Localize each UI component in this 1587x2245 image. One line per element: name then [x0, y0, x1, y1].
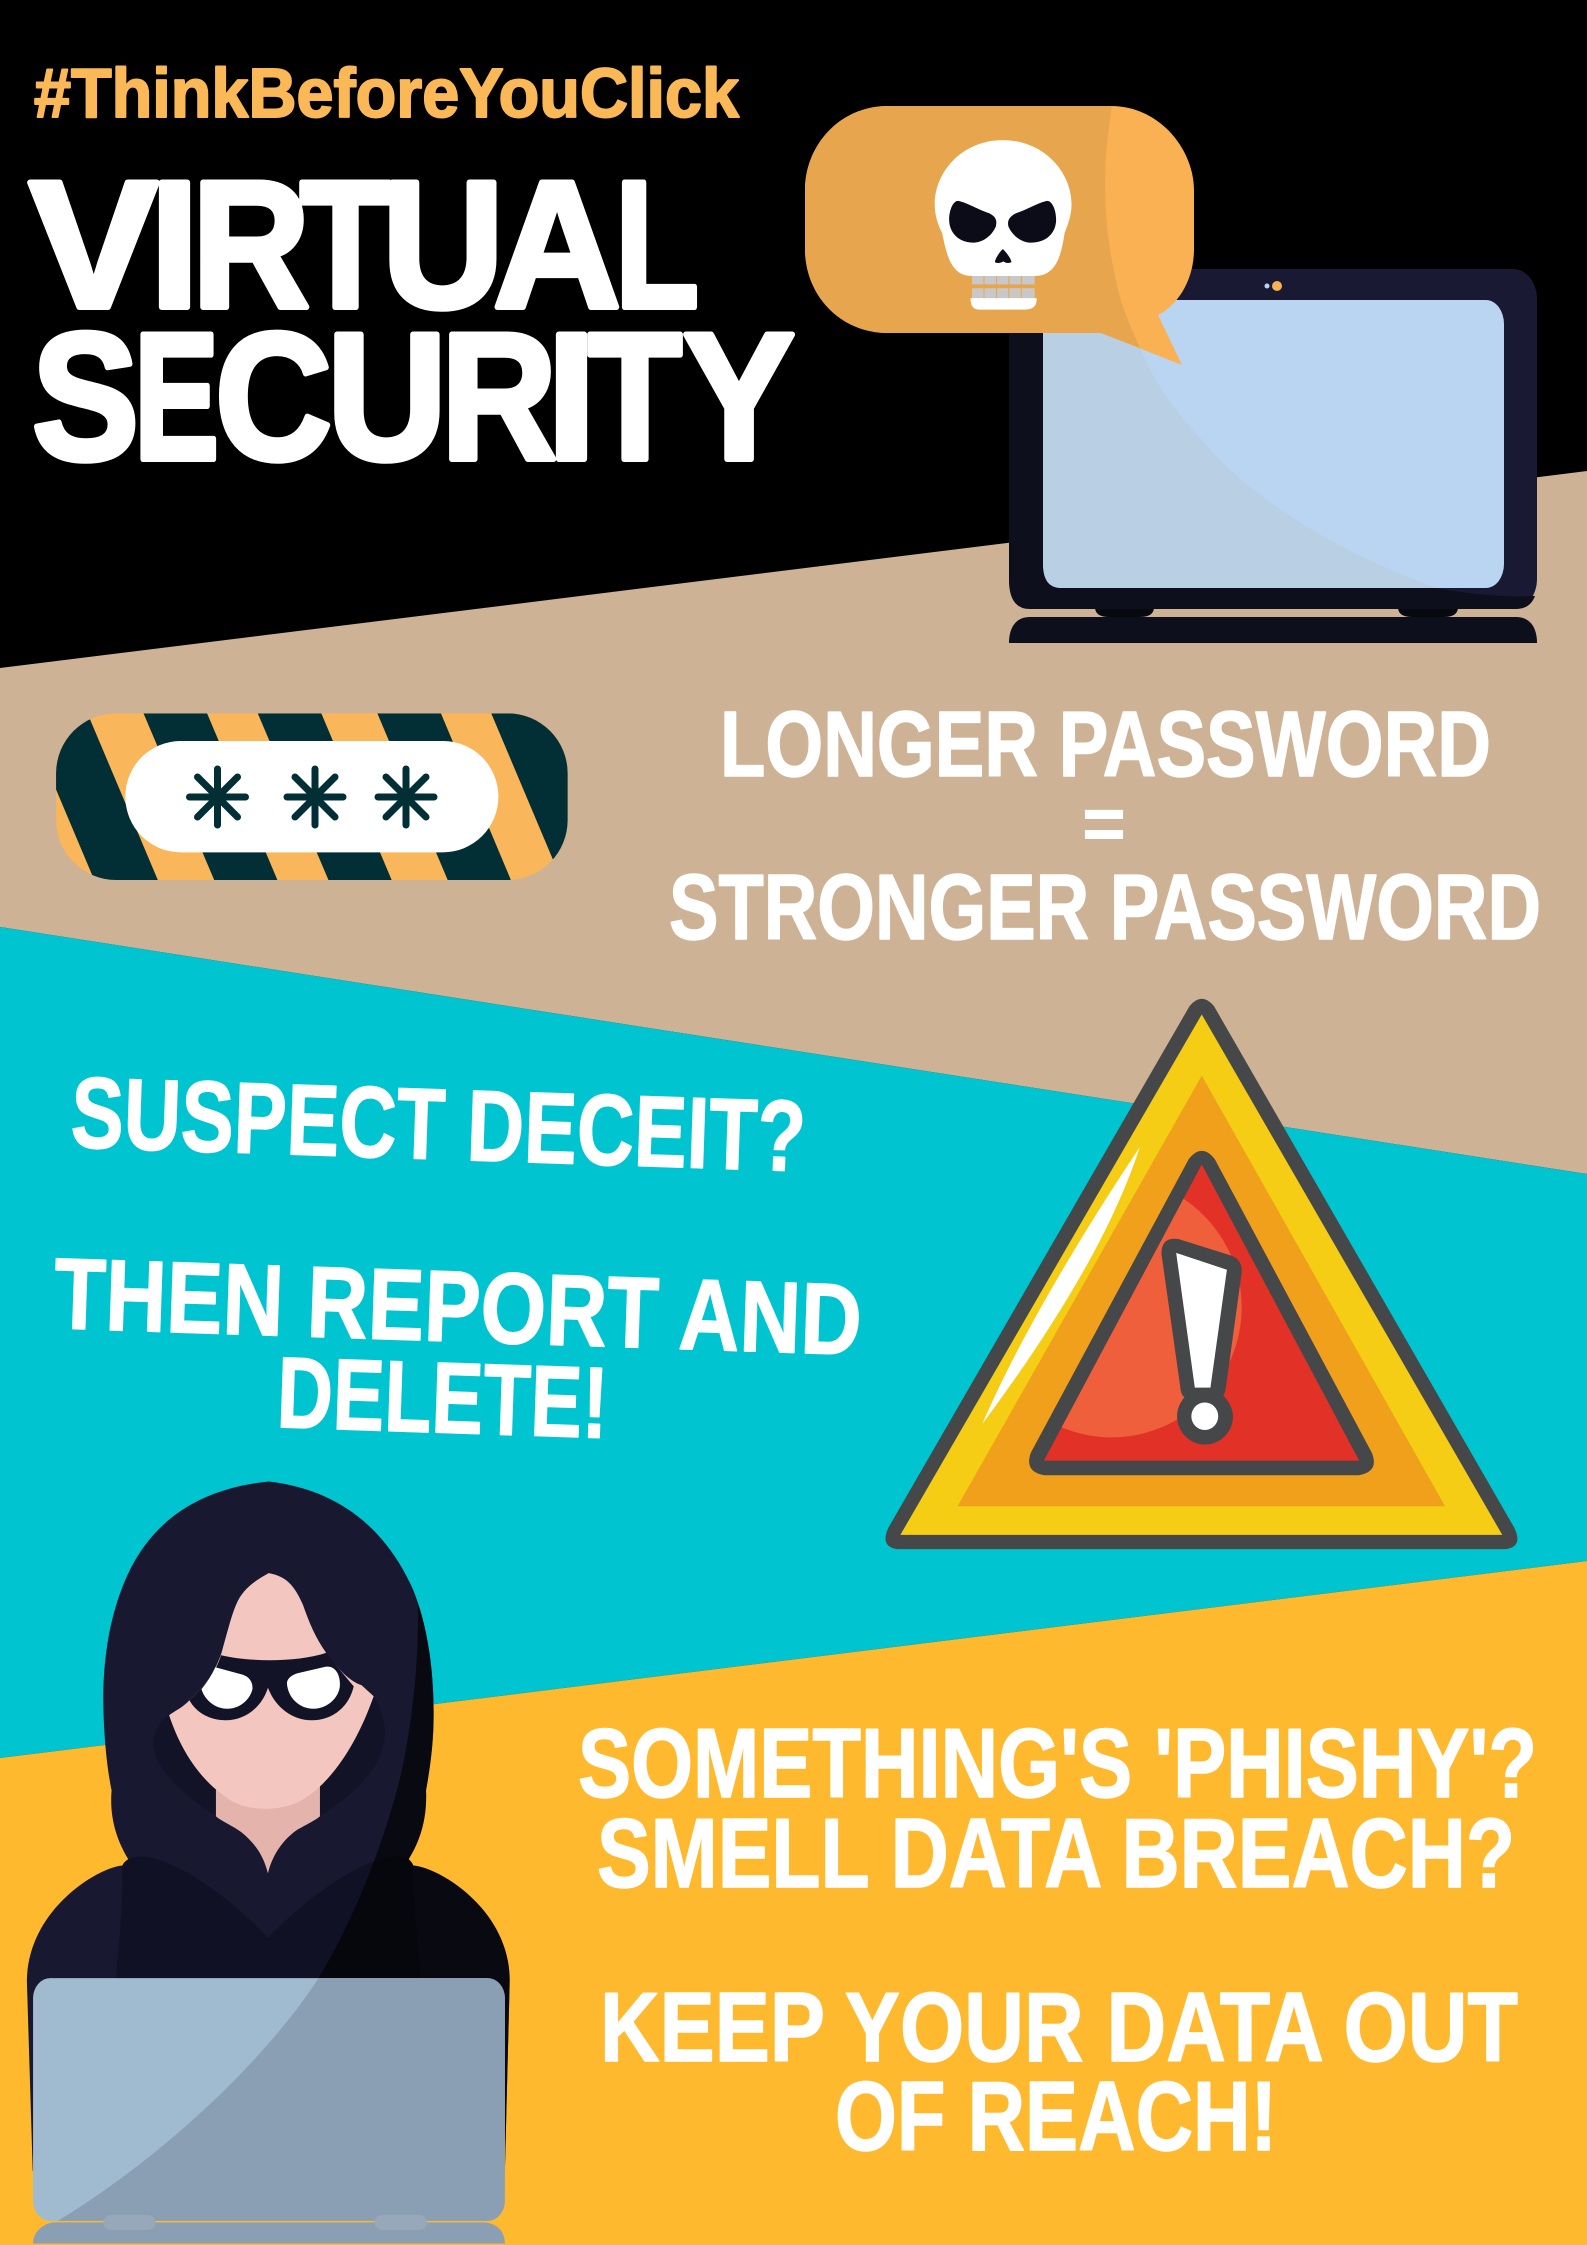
icon: password field [24, 713, 573, 880]
title [29, 144, 795, 498]
text: suspect deceit, report and delete: THEN REPORT AND [52, 1238, 864, 1377]
icon: laptop [1009, 269, 1537, 643]
title line: virtual: V [29, 144, 158, 346]
title line: virtual: T [300, 144, 391, 346]
triangle orange fill [958, 1076, 1445, 1506]
inner outline [1029, 1151, 1374, 1475]
inner highlight [1062, 1198, 1242, 1438]
title line: virtual: R [192, 144, 310, 346]
title line: virtual: A [493, 144, 621, 346]
password white field [125, 741, 498, 852]
password asterisks [190, 769, 434, 825]
title line: security: C [215, 296, 332, 498]
title line: virtual: U [382, 144, 504, 346]
background: tan band [0, 471, 1587, 1174]
hacker mask [189, 1653, 354, 1720]
title line: security: R [441, 296, 557, 498]
text: longer password = stronger password [669, 692, 1541, 959]
laptop screen shadow [1043, 300, 1437, 588]
background: teal band [0, 927, 1587, 1758]
text: phishy warning: OF REACH! [835, 2061, 1277, 2171]
hacker shoulders [27, 1865, 510, 2171]
title line: security: I [547, 296, 596, 498]
laptop feet [1095, 600, 1458, 617]
title line: security: Y [683, 296, 795, 498]
triangle outer outline [885, 999, 1517, 1549]
hashtag heading: #ThinkBeforeYouClick [34, 54, 739, 132]
text: phishy warning [578, 1708, 1537, 2171]
laptop lid [1009, 269, 1537, 609]
title line: virtual: I [150, 144, 199, 346]
bubble left shaded side [805, 106, 1140, 348]
inner red fill [1044, 1164, 1359, 1461]
gleam [982, 1147, 1140, 1424]
hacker eyes [201, 1667, 340, 1709]
text: suspect deceit, report and delete [52, 1057, 864, 1460]
title line: security: S [32, 296, 139, 498]
bubble right side [805, 106, 1194, 365]
hacker neck [216, 1785, 320, 1873]
title line: security: U [327, 296, 447, 498]
background: yellow band [0, 1561, 1587, 2245]
hacker face [169, 1573, 374, 1809]
title line: security: E [134, 296, 219, 498]
exclamation mark [1161, 1239, 1242, 1445]
icon: speech bubble with skull [805, 106, 1194, 365]
triangle yellow fill [900, 1014, 1502, 1535]
hacker chest [116, 1856, 421, 2011]
title line: security: T [588, 296, 682, 498]
hacker laptop feet [103, 2215, 156, 2230]
icon: warning triangle [885, 999, 1517, 1549]
hood inner shadow [153, 1696, 385, 1816]
text: suspect deceit, report and delete: SUSPECT DECEIT? [69, 1057, 808, 1193]
hacker body shadow [318, 1602, 510, 2165]
hacker hood [103, 1482, 434, 1868]
text: longer password = stronger password: = [1082, 782, 1126, 865]
hacker laptop base [33, 2222, 505, 2243]
password pill background [56, 713, 568, 880]
laptop lid shadow [1009, 269, 1535, 609]
illustration: hacker with laptop [27, 1482, 517, 2243]
skull [935, 140, 1072, 310]
laptop base [1009, 617, 1537, 643]
text: suspect deceit, report and delete: DELETE! [275, 1337, 610, 1460]
laptop screen [1043, 300, 1504, 588]
password stripes [24, 713, 573, 880]
hacker laptop screen [33, 1978, 505, 2221]
title line: virtual: L [615, 144, 699, 346]
hacker laptop screen shadow [58, 1978, 505, 2221]
background: black band [0, 0, 1587, 668]
laptop camera dots [1264, 284, 1270, 288]
